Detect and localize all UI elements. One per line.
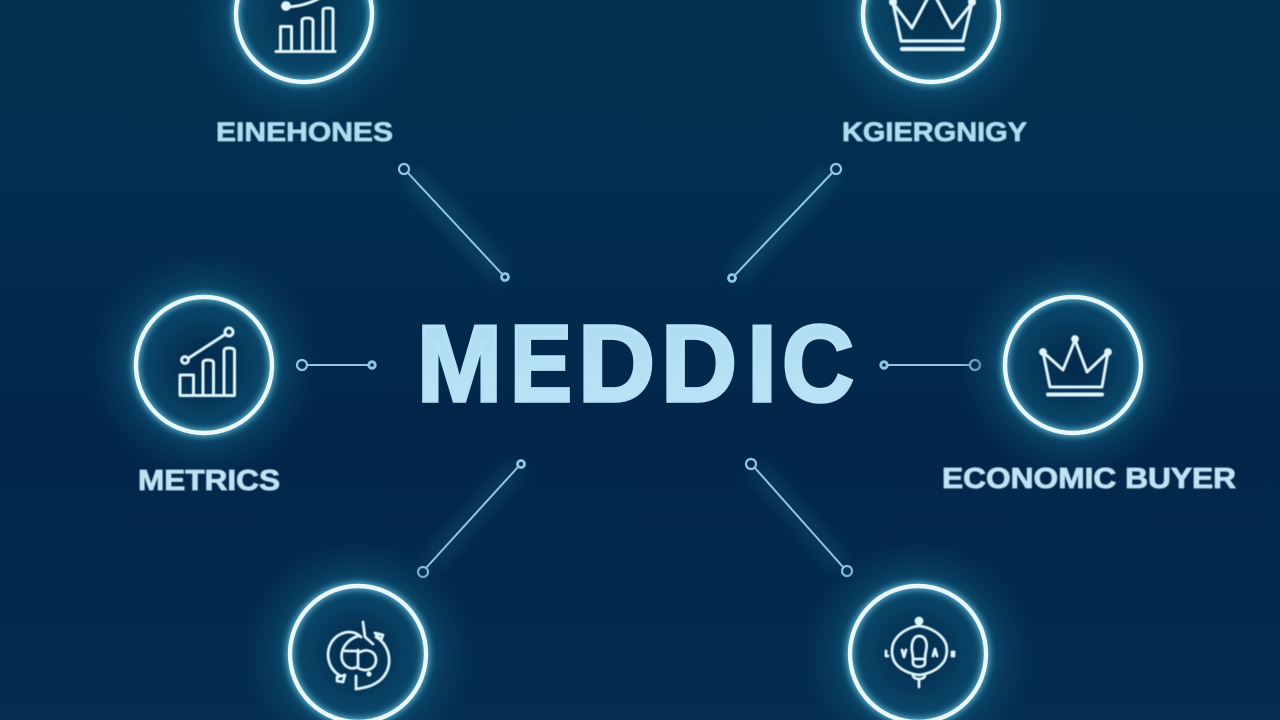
title: C [782,303,854,425]
icon: metrics bar chart [179,328,236,396]
icon: circular arrows and head [328,622,389,689]
label: top right: KGIERGNIGY [842,117,1027,147]
title: E [510,303,572,425]
connector: right [881,360,980,370]
title: D [661,303,737,425]
node: right economic buyer [958,250,1188,480]
icon: top left bar chart [276,0,335,52]
connector: top right [728,164,841,282]
label: metrics: METRICS [138,465,280,497]
node: left metrics [89,250,319,480]
icon: top right crown [890,0,974,49]
node: bottom left [243,539,473,720]
connector: bottom left [418,460,524,577]
node: top right crown [816,0,1046,129]
node: top left chart [189,0,419,129]
connector: left [297,360,375,370]
icon: economic buyer crown [1041,337,1110,394]
label: economic buyer: ECONOMIC BUYER [942,463,1236,495]
node: bottom right [803,539,1033,720]
connector: top left [399,164,508,280]
title: I [747,303,777,425]
connector: bottom right [746,459,852,576]
title: D [578,303,655,425]
label: top left: EINEHONES [216,117,393,147]
icon: champion emblem [886,618,954,687]
title: M [417,303,502,425]
